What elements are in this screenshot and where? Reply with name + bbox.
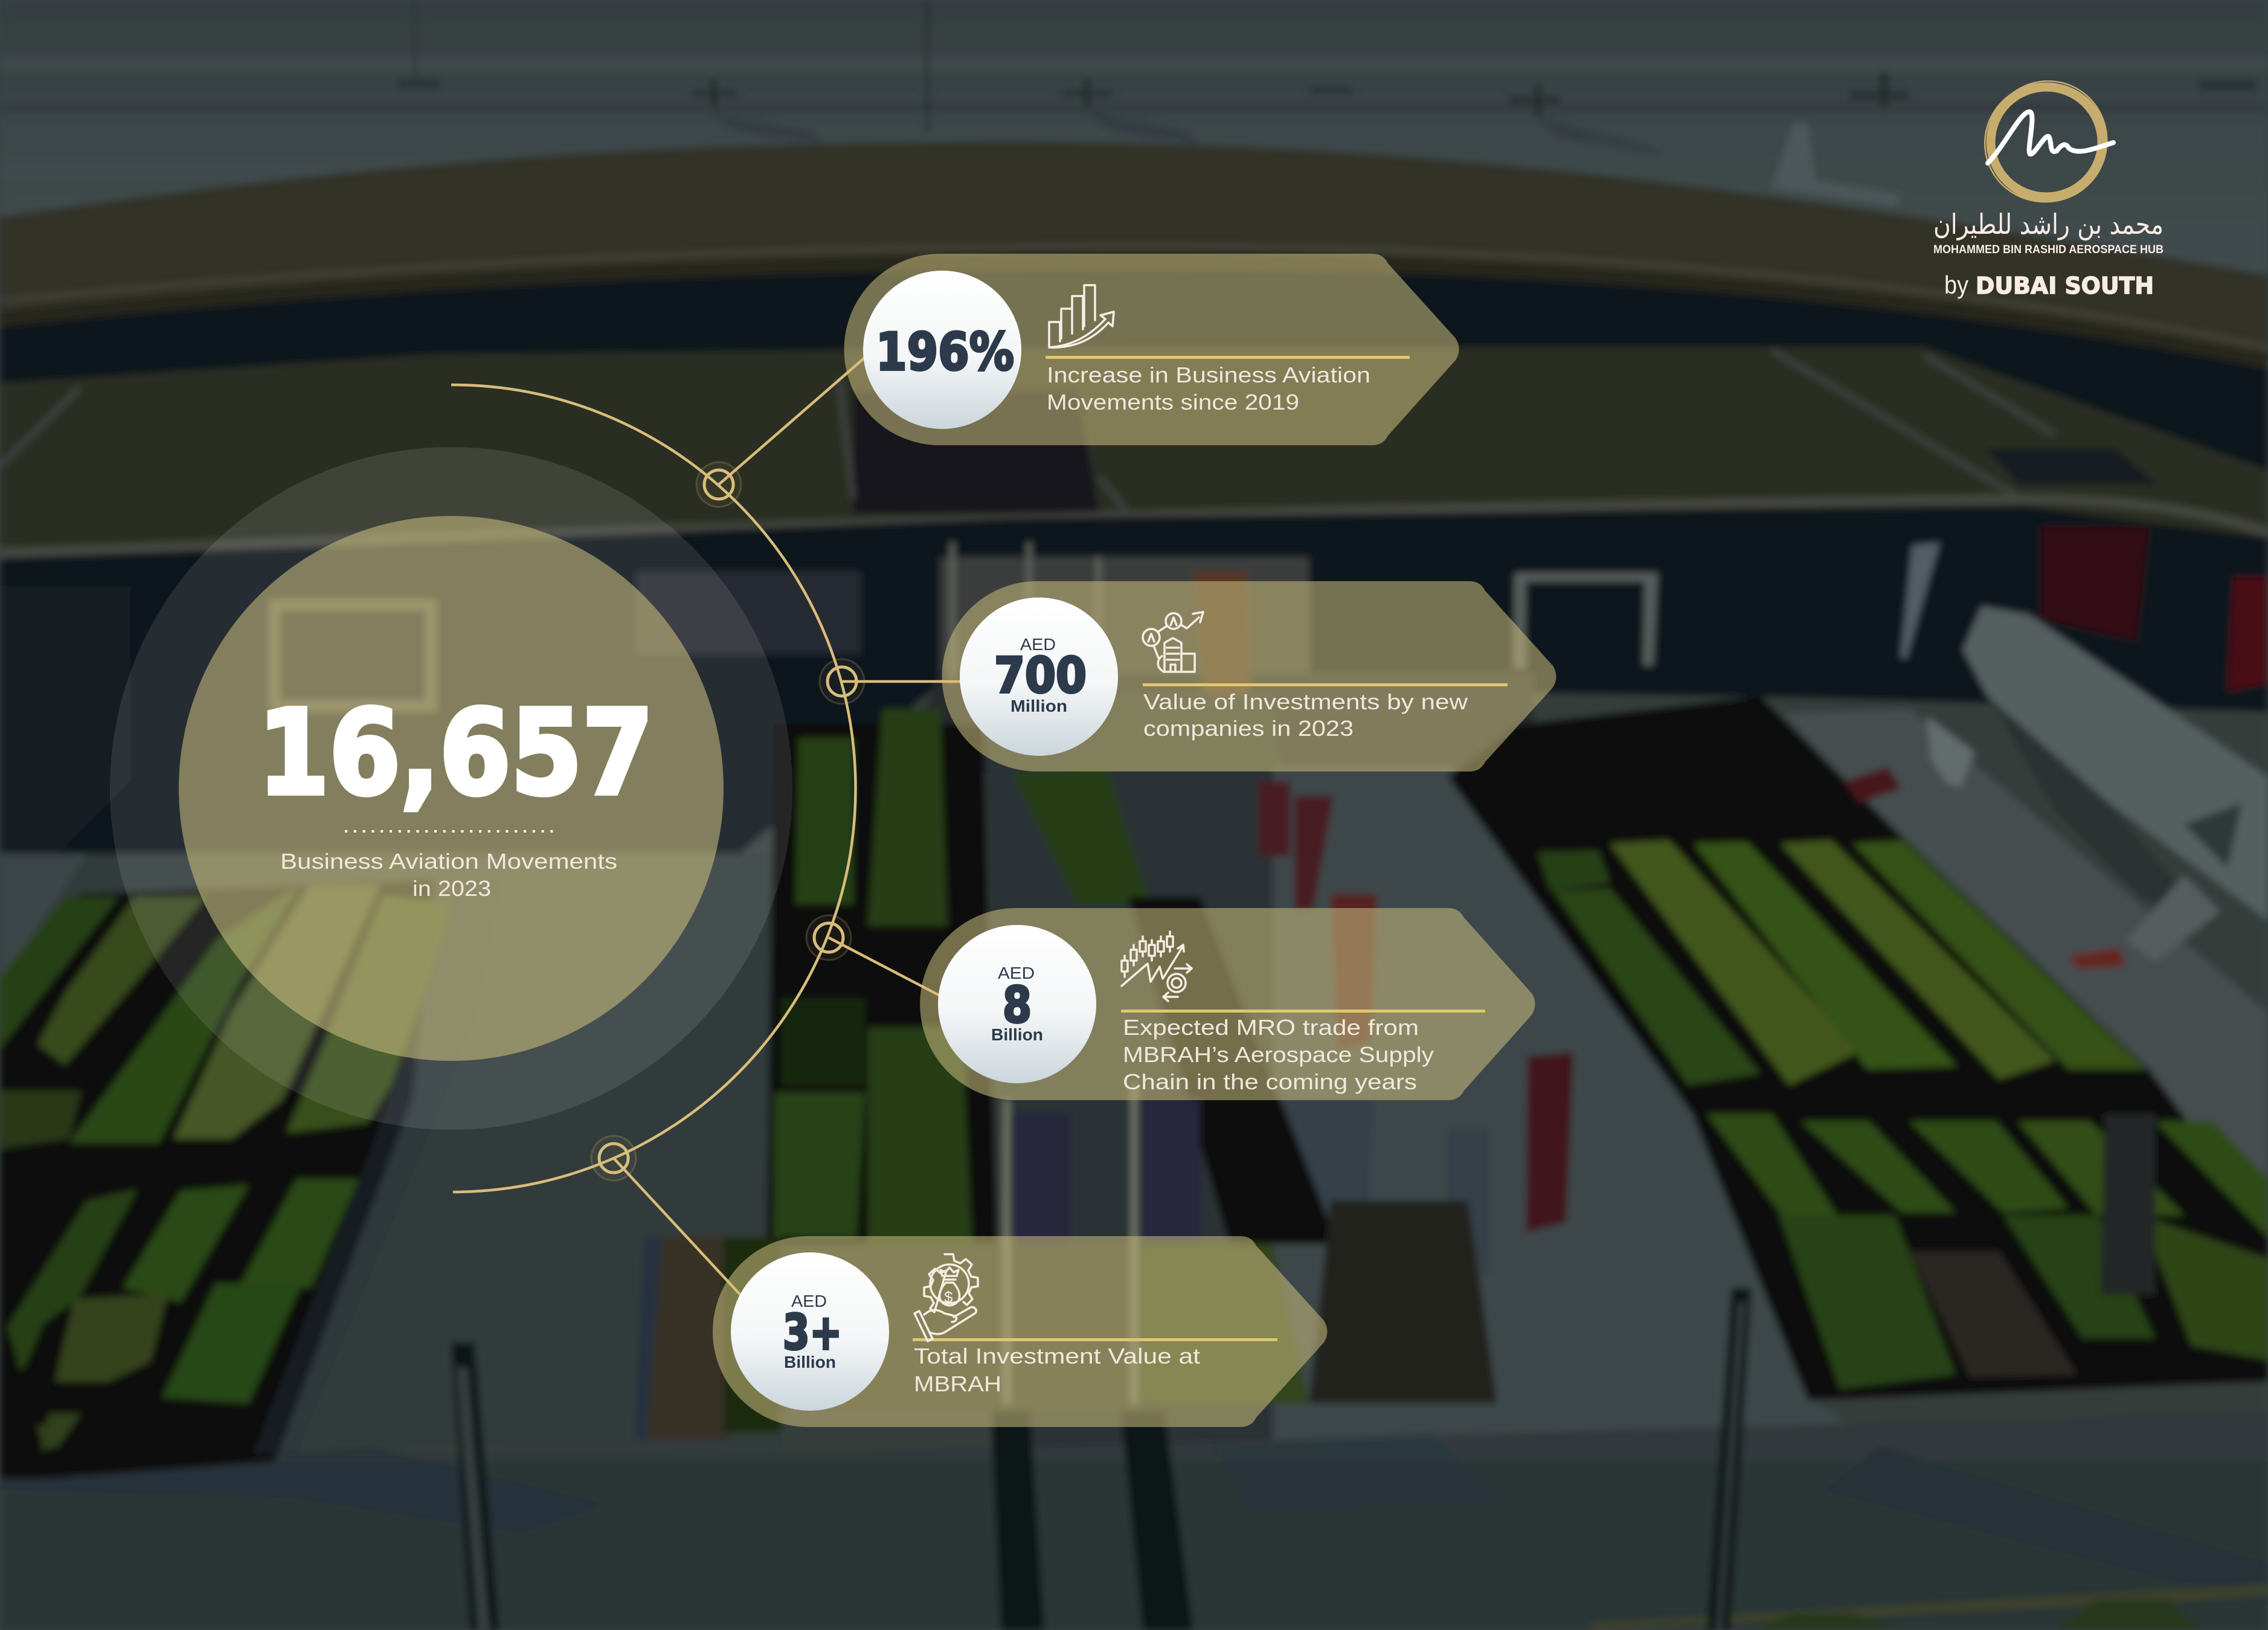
panel: 196% business aviation: [844, 254, 1459, 445]
stat circle: AED 3+ Billion: AED: [791, 1292, 827, 1310]
stat circle: AED 8 Billion: [938, 925, 1096, 1083]
description: MBRAH’s Aerospace Supply: [1123, 1042, 1434, 1067]
stat circle: AED 700 Million: Million: [1010, 697, 1067, 715]
icon: candlesticks and coin: [1122, 932, 1192, 1001]
icon: investors and building: [1143, 612, 1203, 672]
logo English name: MOHAMMED BIN RASHID AEROSPACE HUB: [1933, 243, 2164, 256]
rule: [1046, 356, 1410, 359]
node 3: [806, 915, 851, 960]
icon: gear, money bag and hand: [914, 1254, 978, 1341]
icon: gear, money bag and hand: $: [944, 1288, 953, 1306]
stat circle: AED 700 Million: [960, 598, 1118, 756]
panel: AED 700 million: [942, 581, 1556, 772]
icon: bar chart with rising arrow: [1049, 285, 1114, 347]
description: companies in 2023: [1143, 716, 1354, 741]
stat circle: AED 8 Billion: AED: [998, 964, 1035, 982]
logo Arabic name: محمد بن راشد للطيران: [1933, 208, 2164, 241]
stat circle: AED 8 Billion: Billion: [991, 1025, 1043, 1044]
description: Value of Investments by new: [1143, 689, 1468, 714]
description: Expected MRO trade from: [1123, 1015, 1419, 1040]
description: Total Investment Value at: [914, 1344, 1200, 1368]
stat circle: 196%: 196%: [876, 322, 1014, 382]
central gold circle panel: [179, 516, 724, 1061]
rule: [1143, 683, 1508, 686]
dotted divider: [345, 830, 559, 833]
description: MBRAH: [914, 1371, 1001, 1396]
logo: MBRAH by Dubai South: [1933, 65, 2164, 299]
connector arc: [451, 385, 856, 1192]
main caption: Business Aviation Movements: [280, 849, 617, 874]
description: Chain in the coming years: [1123, 1069, 1417, 1094]
main caption: in 2023: [413, 876, 491, 901]
stat circle: AED 3+ Billion: Billion: [784, 1353, 836, 1371]
stat circle: 196%: [863, 271, 1021, 429]
logo byline: by: [1944, 271, 1968, 299]
description: [914, 1344, 1200, 1396]
stat circle: AED 3+ Billion: 3+: [783, 1304, 842, 1361]
node 2: [820, 659, 864, 704]
description: [1123, 1015, 1434, 1094]
main figure: 16,657: 16,657: [258, 685, 654, 821]
stat circle: AED 8 Billion: 8: [1003, 977, 1032, 1034]
rule: [913, 1338, 1277, 1341]
description: Movements since 2019: [1047, 390, 1299, 414]
stat circle: AED 700 Million: AED: [1020, 635, 1056, 654]
panel: AED 8 billion: [920, 908, 1535, 1100]
rule: [1121, 1010, 1485, 1013]
panel: AED 3+ billion: [713, 1236, 1328, 1427]
stat circle: AED 700 Million: 700: [994, 648, 1087, 704]
outer translucent circle: [110, 447, 792, 1130]
description: [1047, 362, 1370, 414]
logo byline: DUBAI SOUTH: [1976, 272, 2154, 299]
node 4: [591, 1136, 636, 1181]
connector lines: [614, 356, 963, 1299]
logo ring: [1971, 65, 2124, 218]
main caption: [280, 849, 617, 901]
logo signature: [1988, 112, 2113, 163]
node 1: [696, 462, 741, 507]
description: [1143, 689, 1468, 741]
stat circle: AED 3+ Billion: [731, 1252, 889, 1411]
description: Increase in Business Aviation: [1047, 362, 1370, 387]
